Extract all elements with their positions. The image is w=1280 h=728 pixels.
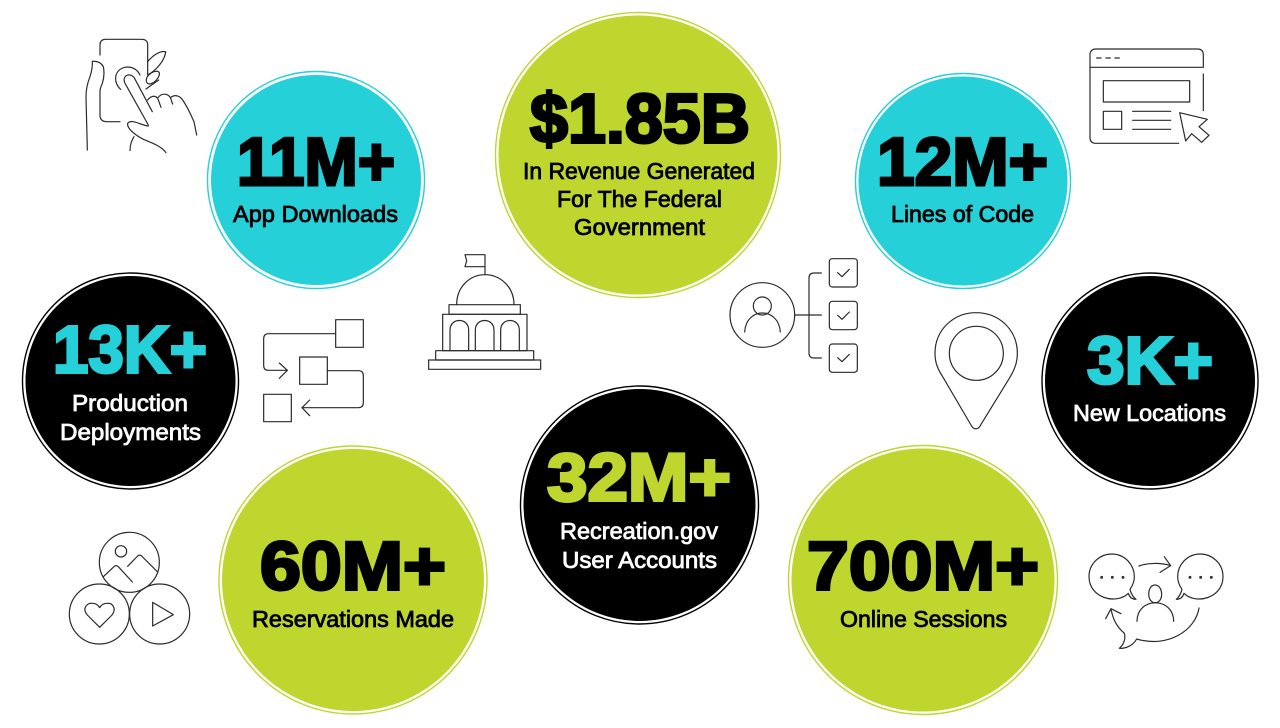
stat circle: 13K+ Production Deployments: Production [72,390,188,416]
stat circle: 60M+ Reservations Made: Reservations Made [252,606,454,632]
stat circle: $1.85B revenue: In Revenue Generated [523,158,755,184]
stat circle: $1.85B revenue: Government [574,214,706,240]
stat circle: 13K+ Production Deployments: Deployments [60,419,201,445]
icon: browser window with cursor [1090,49,1209,143]
stat circle: 12M+ Lines of Code: Lines of Code [891,201,1034,227]
stat circle: 11M+ App Downloads: 11M+ [237,124,395,200]
icon: speech bubbles with person [1089,554,1223,648]
stat circle: 32M+ User Accounts: 32M+ [547,440,731,516]
stat circle: $1.85B revenue: $1.85B [530,80,750,158]
icon: user with checklist [730,259,857,372]
stat circle: 12M+ Lines of Code [856,74,1070,288]
icon: three media circles [69,532,190,644]
icon: map location pin [935,313,1017,429]
stat circle: 60M+ Reservations Made: 60M+ [260,528,446,604]
stat circle: 3K+ New Locations: 3K+ [1087,324,1213,398]
icon: government building with flag [429,255,541,369]
stat circle: 700M+ Online Sessions: 700M+ [807,528,1039,604]
stat circle: 32M+ User Accounts [520,386,758,624]
icon: hand tapping phone [86,39,197,153]
stat circle: 32M+ User Accounts: User Accounts [562,547,717,573]
stat circle: 13K+ Production Deployments: 13K+ [53,312,207,388]
icon: workflow squares and arrows [264,320,363,422]
stat circle: 32M+ User Accounts: Recreation.gov [560,518,719,544]
stat circle: 3K+ New Locations [1042,273,1258,489]
stat circle: 11M+ App Downloads [208,72,424,288]
stat circle: 3K+ New Locations: New Locations [1073,400,1226,426]
stat circle: $1.85B revenue: For The Federal [557,186,722,212]
stat circle: 700M+ Online Sessions [788,446,1058,714]
stat circle: 13K+ Production Deployments [22,273,238,489]
stat circle: 60M+ Reservations Made [219,446,487,714]
stat circle: $1.85B revenue [496,12,780,298]
stat circle: 700M+ Online Sessions: Online Sessions [840,606,1007,632]
stat circle: 11M+ App Downloads: App Downloads [233,201,398,227]
stat circle: 12M+ Lines of Code: 12M+ [877,124,1048,200]
